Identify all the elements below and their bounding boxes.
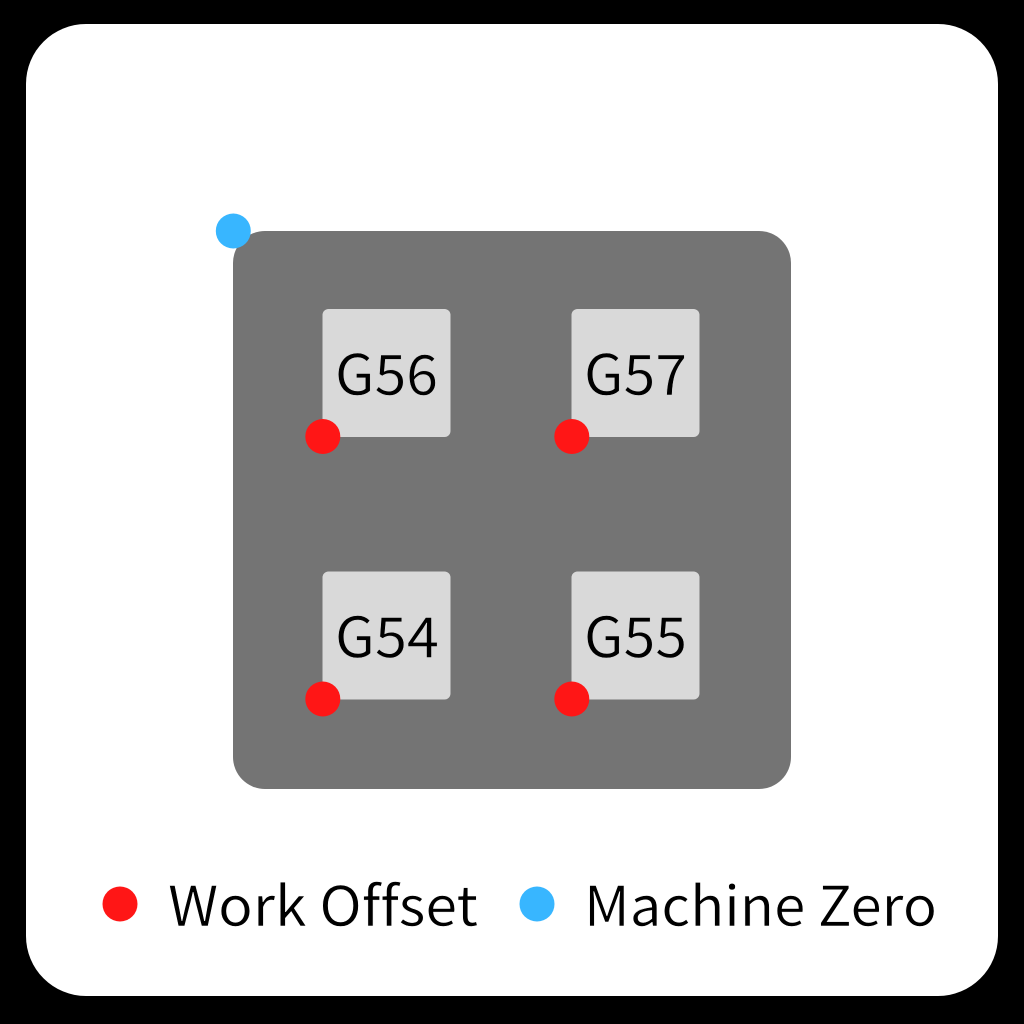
part G55: G55	[584, 594, 687, 674]
machine table plate	[233, 231, 791, 789]
part G55	[554, 572, 700, 716]
part G57	[554, 309, 700, 454]
part G54: G54	[335, 594, 439, 674]
legend: machine zero: Machine Zero	[584, 862, 937, 942]
legend	[102, 862, 937, 942]
part G56	[305, 309, 450, 454]
part G54	[305, 572, 450, 716]
part G56: G56	[335, 331, 438, 412]
machine zero marker	[216, 214, 251, 248]
part G57: G57	[584, 331, 687, 412]
legend: work offset: Work Offset	[168, 862, 478, 942]
